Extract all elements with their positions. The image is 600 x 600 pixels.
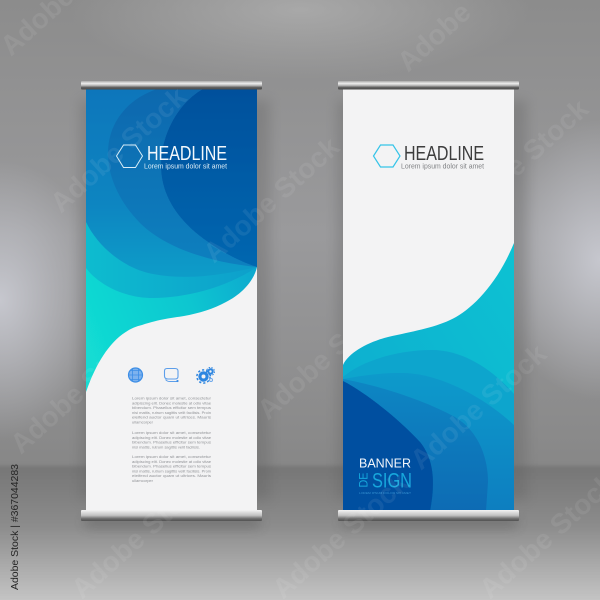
right banner wave artwork (343, 243, 514, 511)
text block: body paragraphs: adipiscing elit. Donec molestie at odio vitae (132, 400, 211, 405)
text: SIGN: SIGN (372, 470, 412, 492)
text block: body paragraphs: adipiscing elit. Donec molestie at odio vitae (132, 459, 211, 464)
text block: body paragraphs: bibendum. Phasellus efficitur sem tempus (132, 440, 211, 445)
right banner bottom base (338, 510, 519, 521)
left headline group (116, 142, 227, 170)
subheading: Lorem ipsum dolor sit amet (401, 162, 484, 170)
watermark: Adobe Stock: Adobe Stock (446, 93, 595, 230)
left banner white sheet (86, 89, 257, 511)
watermark: Adobe Stock: Adobe Stock (44, 81, 193, 218)
text: tiny tagline: LOREM IPSUM DOLOR SIT AMET (359, 491, 412, 495)
text block: body paragraphs: bibendum. Phasellus efficitur sem tempus (132, 464, 211, 469)
heading: HEADLINE: HEADLINE (147, 142, 227, 165)
subheading: Lorem ipsum dolor sit amet (144, 162, 227, 170)
text block: body paragraphs: nisi mattis, rutrum sagittis velit facilisis. Proin (132, 468, 211, 473)
text block: body paragraphs: Lorem ipsum dolor sit amet, consectetur (132, 454, 212, 459)
text block: body paragraphs (132, 396, 212, 483)
panel: left roll-up banner (81, 81, 262, 521)
text block: body paragraphs: Lorem ipsum dolor sit amet, consectetur (132, 396, 212, 400)
icon: chat bubbles (164, 368, 179, 382)
text block: body paragraphs: ullamcorper (132, 478, 154, 483)
banner design logotype (358, 456, 412, 495)
left banner wave artwork (86, 89, 257, 392)
text: BANNER: BANNER (359, 456, 411, 470)
watermark: Adobe Stock: Adobe Stock (197, 131, 346, 268)
watermark: Adobe Stock: Adobe Stock (404, 338, 553, 475)
heading: HEADLINE: HEADLINE (404, 142, 484, 165)
right headline group (374, 142, 484, 170)
icon: hexagon outline (374, 145, 400, 167)
text block: body paragraphs: eleifend auctor quam ut ultrices. Mauris (132, 473, 211, 478)
text block: body paragraphs: nisi mattis, rutrum sagittis velit facilisis. Proin (132, 410, 211, 415)
watermark: Adobe Stock: Adobe Stock (4, 322, 153, 459)
text block: body paragraphs: adipiscing elit. Donec molestie at odio vitae (132, 435, 211, 440)
credit: Adobe Stock id: Adobe Stock | #367044283 (9, 464, 21, 590)
icon: gears (197, 368, 214, 383)
icon: globe (128, 368, 142, 382)
watermark: Adobe Stock: Adobe Stock (251, 288, 400, 425)
text block: body paragraphs: Lorem ipsum dolor sit amet, consectetur (132, 430, 212, 435)
text block: body paragraphs: nisi mattis, rutrum sagittis velit facilisis. (132, 444, 200, 449)
left banner top rail (81, 81, 262, 90)
panel: right roll-up banner (338, 81, 519, 521)
right banner white sheet (343, 89, 514, 511)
text block: body paragraphs: eleifend auctor quam ut ultrices. Mauris (132, 415, 211, 420)
right banner top rail (338, 81, 519, 90)
text block: body paragraphs: bibendum. Phasellus efficitur sem tempus (132, 405, 211, 410)
text: DE vertical: DE (358, 472, 370, 488)
text block: body paragraphs: ullamcorper (132, 420, 154, 424)
left banner bottom base (81, 510, 262, 521)
icon: hexagon outline (116, 145, 142, 168)
banner shadows (80, 100, 527, 527)
